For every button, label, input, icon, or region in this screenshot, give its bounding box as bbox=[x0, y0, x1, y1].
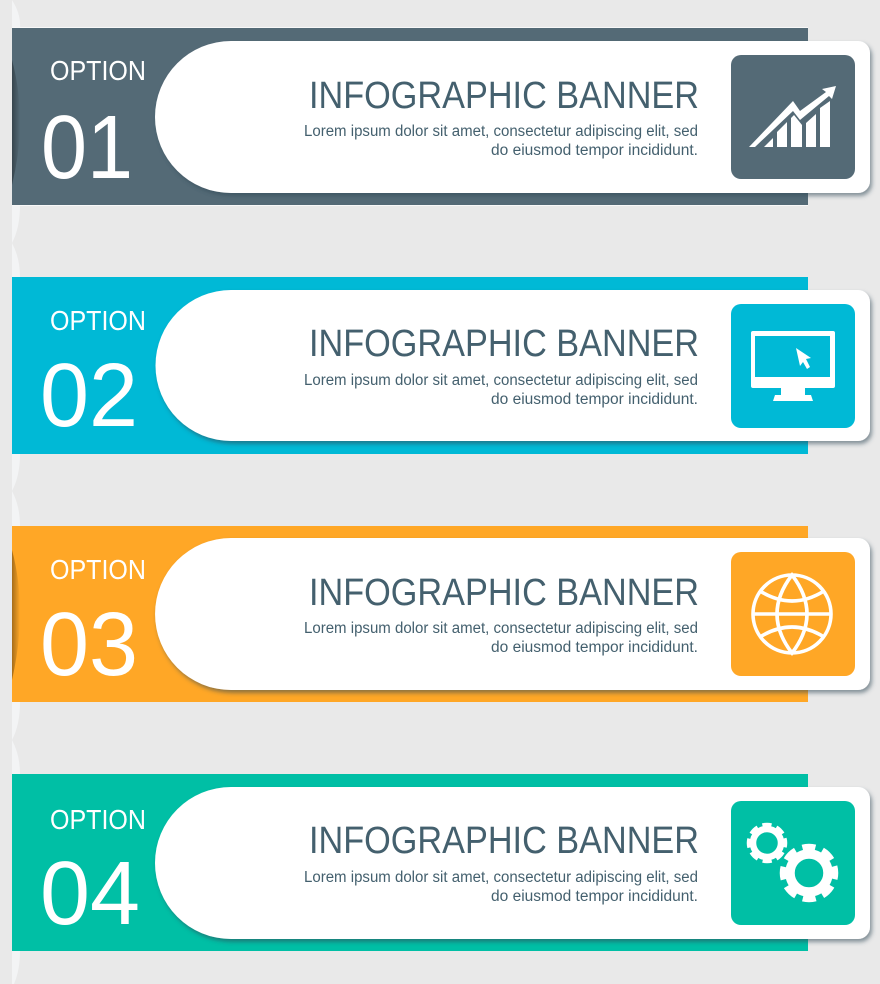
white card 04 bbox=[155, 787, 870, 939]
heading 01: INFOGRAPHIC BANNER bbox=[309, 75, 699, 117]
icon: gears bbox=[731, 801, 855, 925]
panel: option 02 banner bbox=[12, 277, 870, 454]
number 02: 02 bbox=[40, 346, 138, 446]
body text 02 bbox=[304, 372, 698, 408]
body text 01 bbox=[304, 123, 698, 159]
white card 03 bbox=[155, 538, 870, 690]
number 01: 01 bbox=[41, 98, 133, 198]
white card 01 bbox=[155, 41, 870, 193]
panel: option 04 banner bbox=[12, 774, 870, 951]
white card 02 bbox=[156, 290, 870, 441]
option label 04: OPTION bbox=[50, 804, 146, 835]
icon: globe bbox=[731, 552, 855, 676]
heading 03: INFOGRAPHIC BANNER bbox=[309, 572, 699, 614]
body text 03: Lorem ipsum dolor sit amet, consectetur adipiscing elit, sed bbox=[304, 620, 698, 637]
number 04: 04 bbox=[40, 844, 140, 944]
heading 04: INFOGRAPHIC BANNER bbox=[309, 820, 699, 862]
body text 01: Lorem ipsum dolor sit amet, consectetur adipiscing elit, sed bbox=[304, 123, 698, 140]
heading 02: INFOGRAPHIC BANNER bbox=[309, 323, 699, 365]
option label 03: OPTION bbox=[50, 554, 146, 585]
body text 04: Lorem ipsum dolor sit amet, consectetur adipiscing elit, sed bbox=[304, 869, 698, 886]
body text 02: do eiusmod tempor incididunt. bbox=[491, 391, 698, 408]
body text 02: Lorem ipsum dolor sit amet, consectetur adipiscing elit, sed bbox=[304, 372, 698, 389]
panel: option 01 banner bbox=[12, 27, 870, 206]
icon: computer monitor with cursor bbox=[731, 304, 855, 428]
icon: rising chart bbox=[731, 55, 855, 179]
body text 03: do eiusmod tempor incididunt. bbox=[491, 639, 698, 656]
option label 01: OPTION bbox=[50, 55, 146, 86]
body text 04 bbox=[304, 869, 698, 905]
option label 02: OPTION bbox=[50, 305, 146, 336]
panel: option 03 banner bbox=[12, 526, 870, 702]
body text 03 bbox=[304, 620, 698, 656]
number 03: 03 bbox=[40, 595, 138, 695]
body text 04: do eiusmod tempor incididunt. bbox=[491, 888, 698, 905]
body text 01: do eiusmod tempor incididunt. bbox=[491, 142, 698, 159]
